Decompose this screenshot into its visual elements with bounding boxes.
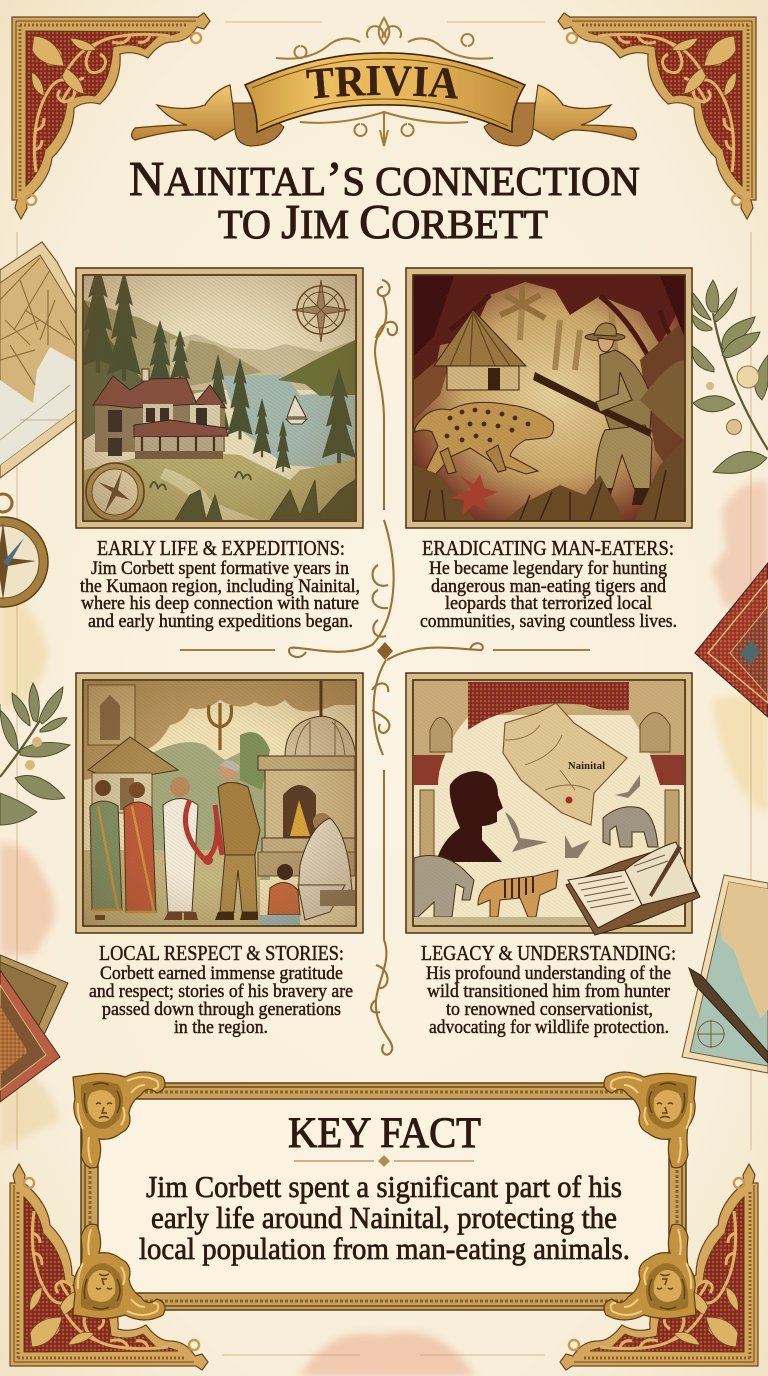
scene: elder in white [163,777,222,920]
scene: trident [208,703,232,750]
decorative map: top left [0,242,77,478]
scene: hunter [533,323,652,505]
scene: compass rose [292,280,350,342]
main title: TO JIM CORBETT [218,194,548,249]
decorative map and pen: right bottom [682,875,768,1073]
scene: child [260,864,300,925]
watercolor stains [0,482,768,1376]
scene: tiger [478,870,558,917]
text: local respect: and respect; stories of his bravery are [89,982,353,1002]
text: legacy: LEGACY & UNDERSTANDING: [421,941,676,965]
scene: background palms and trunks [517,300,654,370]
corner ornament: top-left [12,13,210,219]
scene: pines [79,262,356,472]
decorative carpet: right edge [695,563,768,717]
central diamond [377,642,393,660]
text: early life: the Kumaon region, including Nainital, [80,577,360,597]
scene: thatched hut [434,310,526,390]
scene: mountains [84,300,206,394]
main title: NAINITAL’S CONNECTION [129,151,640,206]
lion corner: top right [604,1072,696,1168]
text: local respect: Corbett earned immense gratitude [100,964,343,984]
lion corner: bottom right [604,1224,696,1320]
text: eradicating man-eaters: communities, saving countless lives. [420,612,677,632]
key fact heading: KEY FACT [288,1110,481,1157]
panel: legacy: Nainital [568,761,605,772]
text: legacy: advocating for wildlife protection. [429,1018,669,1038]
panel: legacy [406,673,700,935]
key fact body: early life around Nainital, protecting the [151,1200,617,1235]
scene: hillside [84,450,355,520]
scene: hills and tree [140,742,270,880]
scene: temple [258,680,356,876]
scene: foreground plants [175,480,355,520]
text: legacy: wild transitioned him from hunter [427,982,670,1002]
scene: ornamental arch [84,681,355,780]
text: legacy: to renowned conservationist, [446,1000,653,1020]
scene: Corbett in tan suit [215,760,260,920]
scene: front foliage with flower [414,440,684,520]
key fact body [139,1169,630,1266]
scene: lake [222,375,355,470]
corner ornament: top-right [558,13,756,219]
scene: map of Uttarakhand [503,703,627,825]
text: eradicating man-eaters: ERADICATING MAN-EATERS: [422,536,674,560]
panel: eradicating man-eaters [406,268,692,528]
text: early life: Jim Corbett spent formative years in [91,559,349,579]
scene: silhouette [436,771,503,862]
lion corner: bottom left [73,1224,165,1320]
scene: woman in green sari [90,780,122,920]
scene: ornamental arch [414,681,684,770]
text: eradicating man-eaters: leopards that terrorized local [445,594,652,614]
scene: canopy foliage [414,276,676,380]
scene: birds [505,775,640,858]
scene: leopard [415,402,554,478]
text: early life: where his deep connection with nature [81,594,359,614]
text: local respect [89,941,353,1038]
text: early life: and early hunting expeditions began. [88,612,353,632]
text: local respect: LOCAL RESPECT & STORIES: [99,941,344,965]
scene: elephant right [603,807,658,847]
text: legacy [421,941,676,1038]
scene: thatched hut [88,737,178,780]
main title [129,151,640,249]
scene: open book and pen [566,842,700,935]
lion corner: top left [73,1072,165,1168]
scene: sailboat [286,396,307,424]
decorative leaf branch: left [0,683,70,825]
panel: key fact frame [73,1072,696,1320]
text: local respect: in the region. [174,1018,268,1038]
text: early life [80,536,360,632]
decorative compass: left edge [0,494,48,607]
panel: local respect [76,673,363,933]
text: legacy: His profound understanding of the [426,964,671,984]
scene: woman in red sari [124,782,156,912]
scene: house [93,369,228,459]
decorative carpets: left edge [0,955,68,1102]
key fact body: Jim Corbett spent a significant part of his [146,1169,622,1204]
central vine ornament [180,280,590,1055]
text: eradicating man-eaters [420,536,677,632]
corner ornament: bottom-left [10,1164,208,1370]
scene: elephant left [414,856,474,917]
text: eradicating man-eaters: dangerous man-eating tigers and [431,577,667,597]
title banner: TRIVIA: TRIVIA [306,66,458,99]
panel: early life [76,262,363,528]
scene: sage [298,813,356,920]
decorative leaf branch: right [691,280,768,473]
key fact divider [294,1156,474,1166]
scene: brass compass [86,463,144,521]
title banner: TRIVIA [130,16,638,146]
text: eradicating man-eaters: He became legendary for hunting [429,559,667,579]
corner ornament: bottom-right [560,1164,758,1370]
text: early life: EARLY LIFE & EXPEDITIONS: [97,536,345,560]
text: local respect: passed down through generations [102,1000,341,1020]
key fact body: local population from man-eating animals. [139,1231,630,1266]
